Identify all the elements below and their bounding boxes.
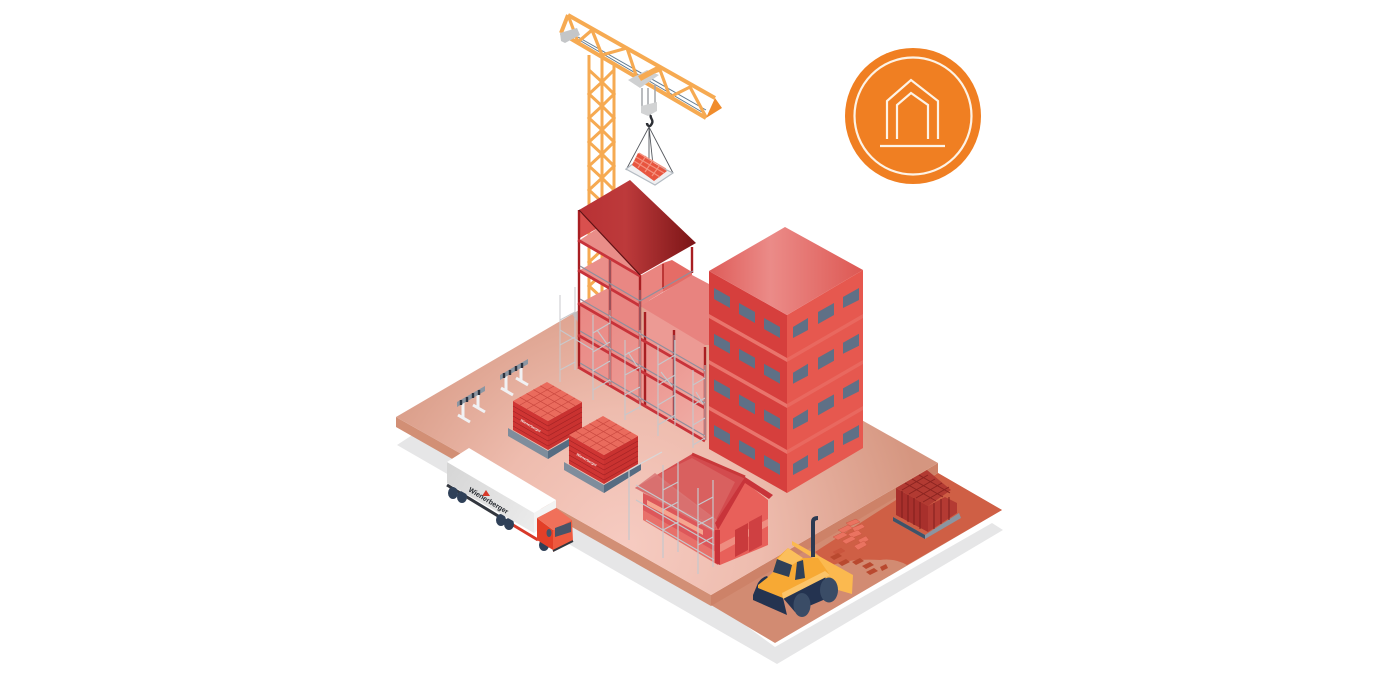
barrier two bbox=[500, 359, 528, 395]
scattered bricks bbox=[833, 519, 869, 555]
light brick band bbox=[647, 500, 703, 535]
crane bbox=[560, 15, 722, 300]
ground shadow bbox=[397, 430, 1003, 664]
brick pallet two bbox=[564, 416, 641, 493]
bulldozer wheels bbox=[794, 593, 810, 617]
fender strip bbox=[782, 571, 830, 599]
crane trolley bbox=[628, 70, 659, 88]
floor slabs bbox=[578, 240, 705, 441]
crane rear weight bbox=[560, 28, 580, 43]
open bay floors bbox=[580, 253, 610, 288]
frame building bbox=[578, 180, 709, 441]
gable light band bbox=[715, 519, 768, 555]
pallet logo: Wienerberger bbox=[520, 418, 542, 434]
shadow patch under frame bbox=[572, 305, 595, 325]
underbody bbox=[783, 575, 828, 612]
house scaffolding bbox=[629, 452, 714, 574]
trailer logo bbox=[482, 490, 490, 496]
right face bbox=[787, 270, 863, 493]
walls: under flat roof bbox=[645, 308, 705, 376]
exhaust stack bbox=[813, 518, 818, 557]
bulldozer body bbox=[758, 548, 830, 598]
house door bbox=[735, 515, 762, 557]
house under construction bbox=[629, 452, 773, 574]
flat roof bbox=[640, 275, 709, 345]
truck cab bbox=[537, 508, 573, 552]
truck chassis bbox=[447, 485, 513, 525]
house gable wall bbox=[715, 482, 768, 565]
translucent roof plane bbox=[635, 473, 717, 532]
fallen bricks trail bbox=[830, 553, 888, 575]
lifting cables bbox=[626, 127, 673, 184]
truck bbox=[447, 448, 573, 552]
roof rim bbox=[692, 454, 745, 477]
walls: second column bays bbox=[610, 258, 640, 338]
windows bbox=[714, 288, 859, 475]
house interior bbox=[635, 454, 745, 527]
cab roof bbox=[777, 548, 803, 565]
brick pallet one bbox=[508, 382, 585, 459]
house front wall bbox=[643, 493, 718, 565]
left face bbox=[709, 271, 787, 493]
bulldozer bbox=[753, 518, 853, 617]
walls: lower bays bbox=[580, 303, 705, 440]
columns bbox=[579, 210, 705, 440]
trailer lettering: Wienerberger bbox=[467, 487, 509, 516]
cab windows bbox=[773, 559, 792, 577]
badge icon: house in orange circle bbox=[845, 48, 981, 184]
crane mast bbox=[589, 55, 614, 300]
suspended brick tray bbox=[626, 153, 673, 185]
rear track bbox=[753, 576, 787, 615]
bulldozer blade bbox=[792, 541, 853, 594]
barriers bbox=[457, 359, 528, 422]
storey ledges right bbox=[787, 314, 863, 454]
gable underside bbox=[580, 212, 598, 238]
walls: top storey right side bbox=[640, 263, 663, 306]
site plate bbox=[396, 285, 938, 606]
roof bbox=[579, 180, 696, 275]
pallet logo: Wienerberger bbox=[576, 452, 598, 468]
main brick building bbox=[709, 227, 863, 493]
scaffolding on frame bbox=[560, 310, 705, 448]
steel rails bbox=[580, 260, 705, 436]
crane jib cables bbox=[578, 37, 706, 112]
scaffold behind frame bbox=[560, 287, 575, 382]
trailer bbox=[447, 462, 534, 533]
crane jib bbox=[561, 15, 715, 118]
truck wheels bbox=[448, 487, 549, 551]
barrier one bbox=[457, 386, 485, 422]
hook block bbox=[641, 84, 657, 126]
storey ledges left bbox=[709, 314, 787, 454]
dark dirt patch bbox=[815, 473, 1002, 566]
crane jib tip bbox=[706, 98, 722, 118]
stacked brick pallet bbox=[893, 470, 961, 539]
lower ground: dirt area bbox=[711, 473, 1002, 643]
roof bbox=[709, 227, 863, 315]
